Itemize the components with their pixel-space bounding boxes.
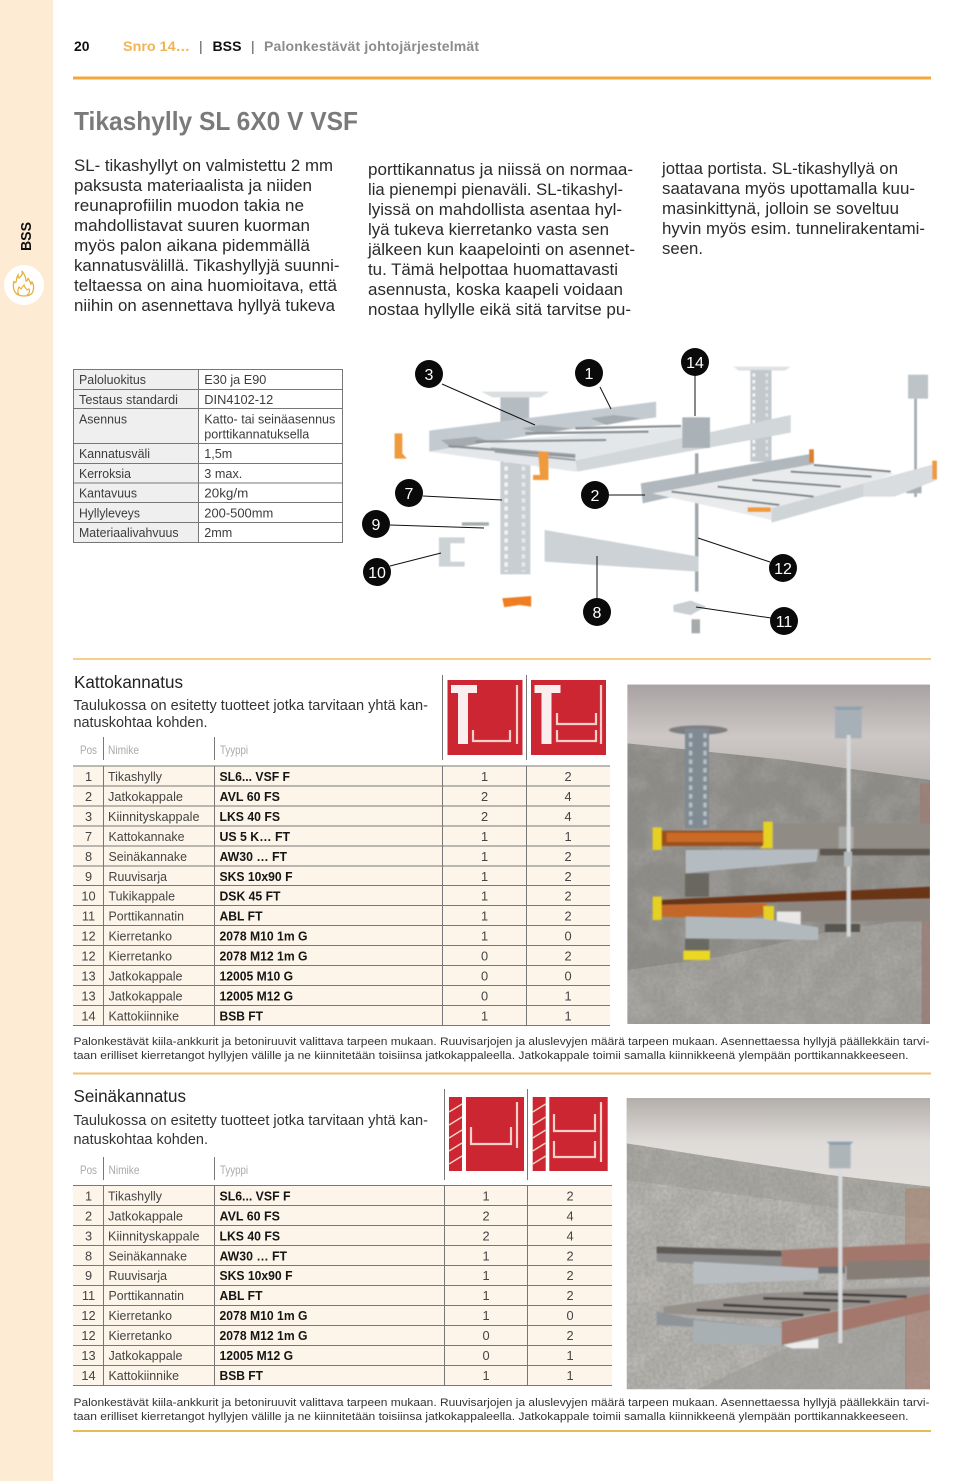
table: Seinäkannatus: 8 [85,1248,92,1264]
photo: wall installation [627,1098,930,1389]
upper tray [429,402,656,452]
table: Seinäkannatus: Kierretanko [108,1308,172,1323]
table: Seinäkannatus: 1 [482,1248,490,1264]
spec table: Kerroksia [79,466,132,481]
spec table: Kannatusväli [79,446,150,461]
bolt [462,522,489,526]
table: Kattokannatus: 4 [564,809,572,824]
body text column 1 [74,156,340,315]
table: Seinäkannatus: Jatkokappale [108,1348,182,1363]
spec table: Asennus [79,412,127,426]
table: Seinäkannatus: SL6... VSF F [220,1188,291,1204]
lower bracket [686,917,818,940]
part number badges: 1 [585,366,594,383]
table: Kattokannatus: Porttikannatin [108,908,184,924]
table: Kattokannatus: Tukikappale [108,888,175,904]
body text column 1: SL- tikashyllyt on valmistettu 2 mm [74,156,333,175]
table: Kattokannatus: 3 [85,809,92,824]
table: Seinäkannatus: Ruuvisarja [108,1268,168,1283]
upper bracket [686,849,818,873]
table: Kattokannatus: 13 [81,968,96,984]
upper tray [656,1253,782,1266]
table: Kattokannatus: Tikashylly [108,769,163,784]
icon: flame [4,265,44,305]
table: Seinäkannatus [73,1186,612,1386]
table: Seinäkannatus: 4 [566,1228,574,1244]
table: Kattokannatus: 1 [481,849,488,864]
table: Kattokannatus: 9 [85,869,92,884]
table: Kattokannatus: 1 [481,769,488,784]
table: Seinäkannatus: 12005 M12 G [220,1348,293,1363]
spec table: Katto- tai seinäasennus [204,412,336,426]
table: Seinäkannatus: 1 [566,1368,574,1383]
table: Kattokannatus: 0 [564,968,572,984]
table: Seinäkannatus: 1 [482,1188,490,1204]
table: Kattokannatus: 0 [564,928,572,944]
table: Seinäkannatus: SKS 10x90 F [220,1268,293,1283]
table: Kattokannatus: ABL FT [220,908,263,924]
table: Kattokannatus: 1 [85,769,92,784]
table: Seinäkannatus: Kierretanko [108,1328,172,1343]
table: Seinäkannatus: 2 [482,1208,490,1224]
table: Seinäkannatus: 2 [566,1328,574,1343]
photo: ceiling installation [627,685,930,1024]
table: Kattokannatus: 2 [564,908,572,924]
side band [0,0,53,1481]
body text column 2 [367,160,635,319]
table: Kattokannatus: Kattokiinnike [108,1008,179,1024]
table: Kattokannatus: 2 [564,948,572,964]
table: Seinäkannatus: ABL FT [220,1288,263,1303]
table: Seinäkannatus: 12 [81,1328,96,1343]
table: Kattokannatus: 1 [481,869,488,884]
table: Kattokannatus: 0 [481,968,488,984]
lower tray [777,900,930,922]
spec table [74,370,342,542]
section intro: Kattokannatus [74,697,428,731]
body text column 2: nostaa hyllylle eikä sitä tarvitse pu- [368,300,631,319]
foot [673,601,706,615]
table: Kattokannatus: 1 [481,1008,488,1024]
table: Seinäkannatus: 2 [482,1228,490,1244]
orange clips [395,433,407,459]
table: Kattokannatus: 12 [81,928,96,944]
bracket [545,530,698,572]
part number badges: 8 [593,605,602,622]
table: Kattokannatus: Ruuvisarja [108,869,168,884]
spec table: 2mm [204,525,232,540]
table: Kattokannatus: 4 [564,789,572,804]
end cap [439,537,465,567]
table: Kattokannatus: 1 [564,988,572,1004]
part number badges: 7 [405,486,414,503]
footnote: Seinäkannatus: Palonkestävät kiila-ankkurit ja betoniruuvit valittava tarpeen mukaan. Ruuvisarjojen ja aluslevyjen määrä tarpeen mukaan. Asennettaessa hyllyjä päällekkäin tarvi- [74,1397,930,1409]
table: Seinäkannatus: 1 [85,1188,92,1204]
rod and hanger [826,1140,854,1146]
spec table: DIN4102-12 [204,392,273,407]
table: Seinäkannatus: Kiinnityskappale [108,1228,200,1244]
body text column 2: lyissä on mahdollista asentaa hyl- [368,200,622,219]
table: Kattokannatus: 11 [82,908,95,924]
table: Kattokannatus: 2078 M12 1m G [220,948,308,964]
table: Kattokannatus: Kierretanko [108,948,172,964]
icons: ceiling mount [448,680,606,755]
table: Kattokannatus: AW30 … FT [220,849,287,864]
table: Kattokannatus: Kierretanko [108,928,172,944]
table: Kattokannatus: DSK 45 FT [220,888,281,904]
table: Kattokannatus: 2 [481,789,488,804]
footnote: Seinäkannatus: taan erilliset kierretangot hyllyjen välille ja ne kiinnitetään toisiinsa jatkokappaleella. Jatkokappale toimii samalla kiinnikkeenä ylempään porttikannakkeeseen. [74,1411,908,1423]
table: Kattokannatus: 2 [85,789,92,804]
page header: Palonkestävät johtojärjestelmät [264,38,479,54]
footnote: Kattokannatus: Palonkestävät kiila-ankkurit ja betoniruuvit valittava tarpeen mukaan. Ruuvisarjojen ja aluslevyjen määrä tarpeen mukaan. Asennettaessa hyllyjä päällekkäin tarvi- [74,1036,930,1048]
page header: | [199,38,203,54]
table: Seinäkannatus: 12 [81,1308,96,1323]
body text column 1: teltaessa on aina huomioitava, että [74,276,338,295]
table: Seinäkannatus: 13 [81,1348,96,1363]
spec table: Kantavuus [79,486,137,500]
post [500,455,530,574]
table: Seinäkannatus: 14 [81,1368,96,1383]
table: Kattokannatus: 2 [564,769,572,784]
body text column 2: tu. Tämä helpottaa huomattavasti [368,260,618,279]
table: Seinäkannatus: LKS 40 FS [220,1228,280,1244]
table: Seinäkannatus: Tikashylly [108,1188,163,1204]
table: Kattokannatus: Jatkokappale [108,968,182,984]
spec table: porttikannatuksella [204,426,310,442]
table: Kattokannatus: BSB FT [220,1008,263,1024]
icons: wall mount [449,1097,608,1171]
section heading: Kattokannatus: Kattokannatus [74,672,183,692]
table header: Seinäkannatus: Tyyppi [220,1163,248,1177]
body text column 3: masinkittynä, jolloin se soveltuu [662,199,899,218]
section intro: Seinäkannatus: Taulukossa on esitetty tuotteet jotka tarvitaan yhtä kan- [74,1112,428,1129]
spec table: Materiaalivahvuus [79,525,179,540]
hanger and rod [908,375,928,399]
body text column 2: asennusta, koska kaapeli voidaan [368,280,623,299]
product parts [395,367,937,633]
part number badges [362,348,798,635]
spec table: 200-500mm [204,506,273,520]
table: Kattokannatus: 2 [481,809,488,824]
table: Kattokannatus: SL6... VSF F [220,769,290,784]
table: Seinäkannatus: 9 [85,1268,92,1283]
lower tray [792,1284,929,1319]
table: Seinäkannatus: Jatkokappale [108,1208,183,1224]
rear post [733,367,791,371]
table: Kattokannatus: 1 [564,829,572,844]
body text column 1: kannatusvälillä. Tikashyllyjä suunni- [74,256,340,275]
body text column 2: jälkeen kun kaapelointi on asennet- [367,240,635,259]
body text column 1: paksusta materiaalista ja niiden [74,176,312,195]
section heading: Seinäkannatus: Seinäkannatus [74,1086,186,1106]
section intro: Seinäkannatus: natuskohtaa kohden. [74,1131,208,1148]
table: Seinäkannatus: 1 [566,1348,574,1363]
table: Kattokannatus: 1 [481,928,488,944]
table: Seinäkannatus: 0 [566,1308,574,1323]
table: Kattokannatus: 7 [85,829,92,844]
table: Kattokannatus: 2078 M10 1m G [220,928,308,944]
section intro: Kattokannatus: natuskohtaa kohden. [74,714,208,731]
table: Seinäkannatus: 2 [566,1188,574,1204]
rod [695,453,698,592]
page header [74,38,479,54]
threaded rod with hanger [833,707,863,712]
table: Seinäkannatus: 1 [482,1308,490,1323]
table: Kattokannatus: 13 [81,988,96,1004]
table header: Kattokannatus [80,675,526,760]
table: Kattokannatus: 1 [481,829,488,844]
side label: BSS: BSS [18,222,35,251]
body text column 1: myös palon aikana pidemmällä [74,236,311,255]
body text column 3: seen. [662,239,703,258]
table: Kattokannatus: 8 [85,849,92,864]
table header: Kattokannatus: Nimike [108,743,139,757]
footnote: Kattokannatus: taan erilliset kierretangot hyllyjen välille ja ne kiinnitetään toisiinsa jatkokappaleella. Jatkokappale toimii samalla kiinnikkeenä ylempään porttikannakkeeseen. [74,1050,908,1062]
table header: Kattokannatus: Pos [80,743,97,757]
table: Seinäkannatus: 0 [482,1328,490,1343]
spec table: E30 ja E90 [204,372,266,387]
table: Seinäkannatus: 1 [482,1368,490,1383]
table: Seinäkannatus: AW30 … FT [220,1248,287,1264]
body text column 3: jottaa portista. SL-tikashyllyä on [661,159,898,178]
table: Seinäkannatus: Porttikannatin [108,1288,184,1303]
upper post [481,392,549,397]
table header: Kattokannatus: Tyyppi [220,743,248,757]
part number badges: 3 [425,367,434,384]
part number badges: 9 [372,517,381,534]
table: Seinäkannatus: Seinäkannake [108,1248,187,1264]
table: Kattokannatus: 2 [564,849,572,864]
body text column 3: saatavana myös upottamalla kuu- [662,179,915,198]
spec table: Hyllyleveys [79,506,140,520]
table: Kattokannatus: 12005 M12 G [220,988,293,1004]
table header: Seinäkannatus [80,1089,528,1180]
table: Kattokannatus: Jatkokappale [108,988,182,1004]
lower tray [641,453,814,503]
table: Kattokannatus [73,766,610,1026]
table: Kattokannatus: 1 [481,908,488,924]
table: Kattokannatus: Seinäkannake [108,849,187,864]
table: Kattokannatus: Kattokannake [108,829,184,844]
spec table: Testaus standardi [79,392,178,407]
table: Kattokannatus: 1 [564,1008,572,1024]
table: Seinäkannatus: 2 [566,1288,574,1303]
table: Seinäkannatus: 2 [566,1268,574,1283]
body text column 3 [661,159,925,258]
table: Kattokannatus: Jatkokappale [108,789,183,804]
body text column 1: mahdollistavat suuren kuorman [74,216,310,235]
footnote: Seinäkannatus [74,1397,930,1423]
leader lines [390,375,771,618]
section intro: Kattokannatus: Taulukossa on esitetty tuotteet jotka tarvitaan yhtä kan- [74,697,428,714]
body text column 2: porttikannatus ja niissä on normaa- [368,160,633,179]
table: Kattokannatus: Kiinnityskappale [108,809,200,824]
page header: | [251,38,255,54]
table: Kattokannatus: LKS 40 FS [220,809,280,824]
table: Seinäkannatus: 11 [82,1288,95,1303]
body text column 2: lyä tukeva kierretanko vasta sen [368,220,609,239]
table: Kattokannatus: 0 [481,988,488,1004]
table: Seinäkannatus: 2 [566,1248,574,1264]
page header: 20 [74,38,90,54]
exploded product diagram [362,348,937,635]
table: Kattokannatus: SKS 10x90 F [220,869,293,884]
page header: Snro 14… [123,38,190,54]
body text column 2: lia pienempi pienaväli. SL-tikashyl- [368,180,623,199]
table: Kattokannatus: 10 [81,888,96,904]
table: Kattokannatus: 0 [481,948,488,964]
table: Seinäkannatus: 4 [566,1208,574,1224]
table: Kattokannatus: US 5 K… FT [220,829,290,844]
part number badges: 10 [368,565,386,582]
table: Seinäkannatus: 1 [482,1268,490,1283]
table: Kattokannatus: 2 [564,869,572,884]
table: Seinäkannatus: 2078 M10 1m G [220,1308,308,1323]
table: Kattokannatus: 12005 M10 G [220,968,293,984]
spec table: 3 max. [204,466,242,481]
table: Seinäkannatus: AVL 60 FS [220,1208,280,1224]
table header: Seinäkannatus: Nimike [108,1163,140,1177]
table: Seinäkannatus: 2078 M12 1m G [220,1328,308,1343]
table: Kattokannatus: 14 [81,1008,96,1024]
body text column 1: reunaprofiilin muodon takia ne [74,196,304,215]
title: Tikashylly SL 6X0 V VSF [74,106,358,136]
table: Seinäkannatus: 2 [85,1208,92,1224]
part number badges: 14 [686,355,704,372]
part number badges: 12 [774,561,792,578]
table: Seinäkannatus: Kattokiinnike [108,1368,179,1383]
body text column 1: niihin on asennettava hyllyä tukeva [74,296,336,315]
table: Seinäkannatus: BSB FT [220,1368,263,1383]
table: Kattokannatus: 12 [81,948,96,964]
table: Seinäkannatus: 0 [482,1348,490,1363]
table: Kattokannatus: AVL 60 FS [220,789,280,804]
body text column 3: hyvin myös esim. tunnelirakentami- [662,219,925,238]
section intro: Seinäkannatus [74,1112,428,1148]
part number badges: 11 [776,614,792,631]
spec table: 1,5m [204,446,232,461]
table: Kattokannatus: 2 [564,888,572,904]
upper tray [773,823,930,849]
table: Seinäkannatus: 3 [85,1228,92,1244]
spec table: 20kg/m [204,486,248,500]
table: Kattokannatus: 1 [481,888,488,904]
table header: Seinäkannatus: Pos [80,1163,97,1177]
footnote: Kattokannatus [74,1036,930,1062]
part number badges: 2 [591,488,600,505]
spec table: Paloluokitus [79,372,146,387]
page header: BSS [212,38,242,54]
table: Seinäkannatus: 1 [482,1288,490,1303]
